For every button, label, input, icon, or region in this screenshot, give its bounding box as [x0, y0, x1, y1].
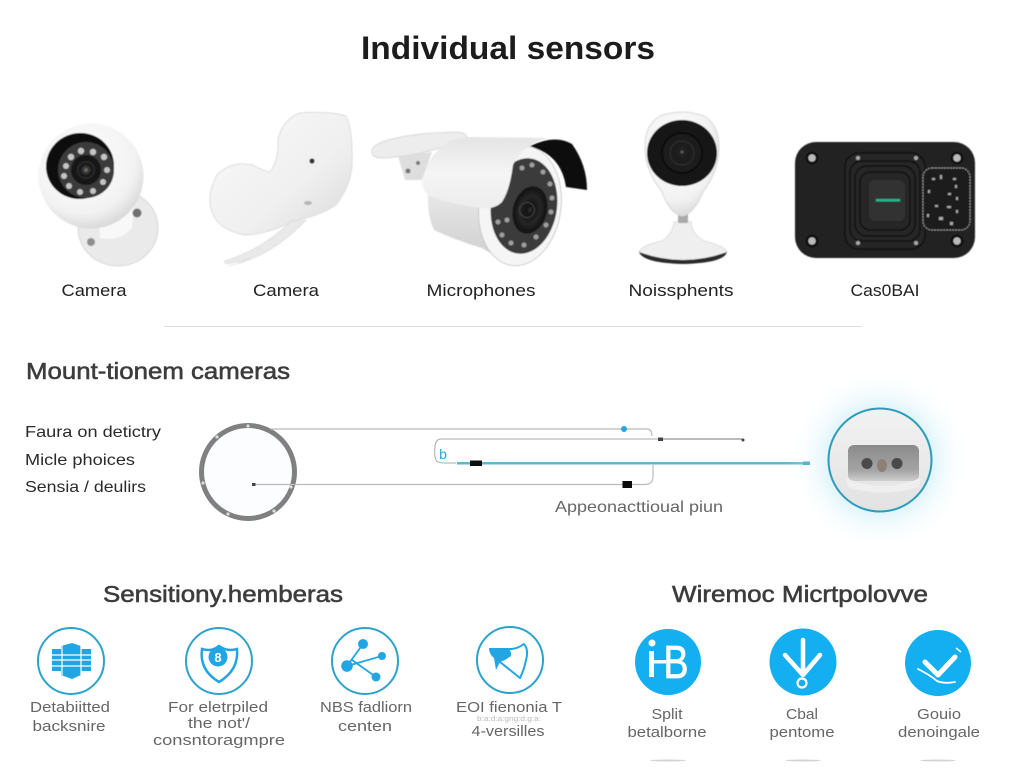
label: cas0bai: Cas0BAI	[850, 281, 920, 300]
icon: iB badge: B	[664, 636, 688, 688]
label: for eletrpiled: For eletrpiled	[168, 699, 268, 716]
label: eoi fienonia: 4-versilles	[472, 723, 544, 740]
label: cbal	[770, 706, 834, 741]
panel: wiremoc icons	[628, 628, 980, 762]
icon: download arrow	[770, 628, 836, 696]
icon: shield: 8	[214, 650, 222, 665]
label: camera 2: Camera	[253, 281, 320, 300]
label: detabitted: backsnire	[32, 718, 106, 735]
heading: mount cameras: Mount-tionem cameras	[26, 358, 290, 384]
caption: Appeonacttioual piun	[555, 499, 723, 516]
label: split	[628, 706, 706, 741]
text block: mount options	[25, 424, 161, 496]
label: for eletrpiled: the not'/	[188, 715, 251, 732]
label: cbal: Cbal	[786, 706, 818, 723]
label: split: betalborne	[628, 724, 706, 741]
label: eoi fienonia: EOI fienonia T	[456, 699, 562, 716]
label: microphones: Microphones	[426, 281, 536, 300]
connector lines	[253, 429, 810, 484]
markers: b	[439, 446, 447, 462]
icon: white curved microphone	[210, 112, 352, 266]
icon: bullet camera	[372, 132, 587, 271]
label: for eletrpiled	[153, 699, 285, 749]
label: eoi fienonia	[456, 699, 562, 740]
heading: wiremoc: Wiremoc Micrtpolovve	[672, 581, 928, 607]
label: gouio	[898, 706, 980, 741]
label: nbs fadliorn	[320, 699, 412, 735]
panel: sensitiony icons	[30, 627, 562, 749]
label: nbs fadliorn: centen	[338, 718, 392, 735]
markers	[252, 426, 744, 488]
panel: individual sensors	[38, 112, 975, 300]
icon: shield	[186, 628, 252, 694]
title: Individual sensors	[361, 30, 655, 66]
label: detabitted	[30, 699, 110, 735]
icon: ball camera	[38, 124, 158, 266]
diagram: mounting plan	[201, 424, 810, 518]
label: camera 1: Camera	[62, 281, 127, 300]
label: detabitted: Detabiitted	[30, 699, 110, 716]
ring	[201, 424, 294, 518]
text block: mount options: Sensia / deulirs	[25, 479, 146, 496]
text block: mount options: Faura on detictry	[25, 424, 161, 441]
text block: mount options: Micle phoices	[25, 452, 135, 469]
label: split: Split	[652, 706, 683, 723]
label: for eletrpiled: consntoragmpre	[153, 732, 285, 749]
icon: megaphone	[477, 627, 543, 693]
label: gouio: Gouio	[917, 706, 961, 723]
icon: desk camera	[639, 112, 727, 264]
heading: sensitiony: Sensitiony.hemberas	[103, 581, 343, 607]
icon: check mark	[905, 630, 971, 696]
label: noissphents: Noissphents	[628, 281, 734, 300]
label: gouio: denoingale	[898, 724, 980, 741]
label: nbs fadliorn: NBS fadliorn	[320, 699, 412, 716]
label: eoi fienonia: b:a:d:a:gng:d:g:a:	[477, 716, 541, 723]
icon: black sensor board	[795, 142, 975, 258]
icon: glowing sensor port	[788, 368, 972, 552]
icon: network	[332, 628, 398, 694]
label: cbal: pentome	[770, 724, 834, 741]
icon: building	[38, 628, 104, 694]
icon: iB badge	[635, 629, 701, 695]
